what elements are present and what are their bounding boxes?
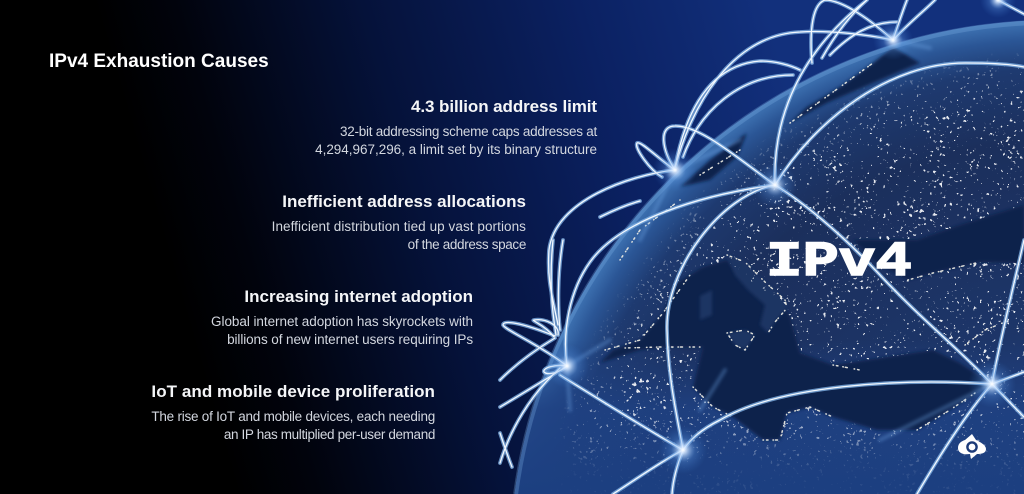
network arcs: outer glow (500, 0, 1024, 494)
IPv4 label on globe: IPv4 (766, 234, 912, 290)
panel: IoT and mobile (151, 382, 435, 442)
southern land mass tint (514, 357, 1024, 494)
bright coastal lights (605, 63, 1010, 440)
text: inefficient allocations: of the address space (408, 237, 526, 252)
text: internet adoption: billions of new internet users requiring IPs (227, 332, 473, 347)
network arcs: white core (500, 0, 1024, 494)
title: IPv4 Exhaustion Causes (49, 51, 269, 72)
Italy, Sicily and Sardinia (700, 265, 786, 350)
heading: inefficient allocations: Inefficient address allocations (282, 192, 526, 211)
heading: internet adoption: Increasing internet adoption (244, 287, 473, 306)
text: inefficient allocations (272, 219, 526, 252)
text: IoT and mobile: The rise of IoT and mobile devices, each needing (151, 409, 435, 424)
seas (600, 47, 1024, 440)
text: inefficient allocations: Inefficient distribution tied up vast portions (272, 219, 526, 234)
text: address limit: 32-bit addressing scheme caps addresses at (340, 124, 597, 139)
soft light streaks (567, 40, 992, 440)
text: IoT and mobile: an IP has multiplied per-user demand (224, 427, 435, 442)
text: IoT and mobile (151, 409, 435, 442)
speckled city lights (560, 53, 1024, 494)
panel: address limit (315, 97, 598, 157)
heading: address limit: 4.3 billion address limit (411, 97, 597, 116)
text: address limit: 4,294,967,296, a limit set by its binary structure (315, 142, 597, 157)
icon: brand cloud logo (958, 434, 986, 459)
text: internet adoption (211, 314, 473, 347)
glowing network nodes (545, 0, 1016, 474)
panel: internet adoption (211, 287, 473, 347)
heading: IoT and mobile: IoT and mobile device proliferation (151, 382, 435, 401)
atmosphere rim (516, 23, 1024, 494)
panel: inefficient allocations (272, 192, 526, 252)
text: address limit (315, 124, 598, 157)
globe (500, 0, 1024, 494)
text: internet adoption: Global internet adoption has skyrockets with (211, 314, 473, 329)
